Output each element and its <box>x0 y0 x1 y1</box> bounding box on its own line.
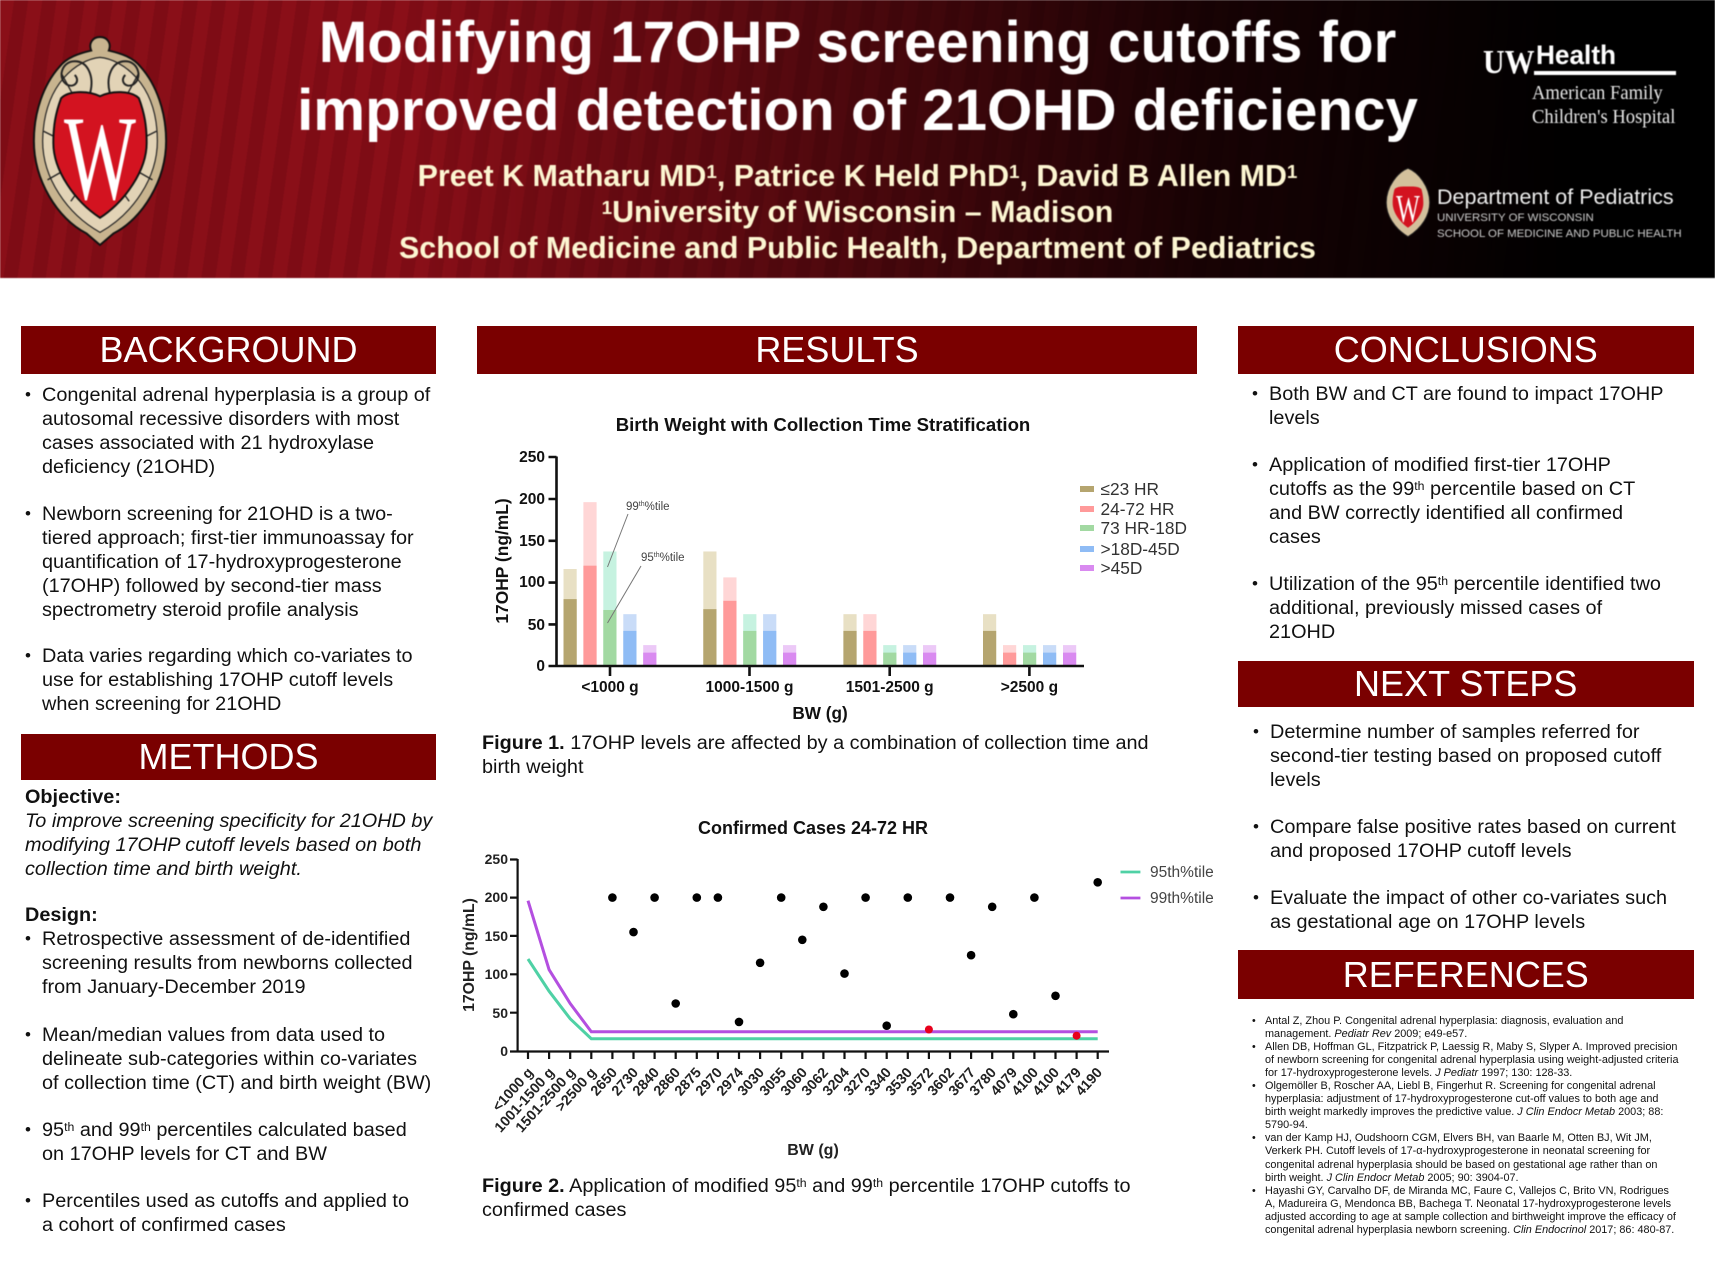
text: background bullet 1 <box>42 383 430 479</box>
text: reference list <box>1252 1014 1679 1236</box>
text: reference list: congenital adrenal hyperplasia newborn screening. Clin Endocrinol 2017; 86: 480-87. <box>1265 1224 1674 1236</box>
scatter chart: confirmed cases 24-72 HR: 3780 <box>967 1065 1000 1099</box>
heading: conclusions <box>1238 326 1694 374</box>
logo: UW Health American Family Children's Hospital: UW <box>1483 44 1535 81</box>
text: conclusion 2: and BW correctly identified all confirmed <box>1269 502 1623 524</box>
text: background bullet 2 <box>42 502 414 622</box>
scatter chart: confirmed cases 24-72 HR: 1001-1500 g <box>492 1065 558 1136</box>
bar chart: birth weight with collection time stratification: 24-72 HR <box>1100 499 1174 519</box>
text: objective <box>25 810 434 880</box>
heading: methods: METHODS <box>138 736 318 777</box>
text: reference list: Hayashi GY, Carvalho DF, de Miranda MC, Faure C, Vallejos C, Brito VN, Rodrigues <box>1265 1185 1669 1197</box>
bar chart: birth weight with collection time stratification: >45D <box>1100 558 1142 578</box>
caption: figure 2: confirmed cases <box>482 1199 626 1221</box>
text: background bullet 2: (17OHP) followed by second-tier mass <box>42 575 382 597</box>
text: next step 1 <box>1270 720 1661 792</box>
text: conclusion 1: Both BW and CT are found to impact 17OHP <box>1269 383 1664 405</box>
text: background bullet 2: spectrometry steroid profile analysis <box>42 599 359 621</box>
text: objective: modifying 17OHP cutoff levels based on both <box>25 834 421 856</box>
panel: next steps <box>1238 661 1694 933</box>
bar chart: birth weight with collection time stratification: 0 <box>536 658 545 675</box>
scatter chart: confirmed cases 24-72 HR: 4100 <box>1009 1065 1042 1099</box>
scatter chart: confirmed cases 24-72 HR: 1501-2500 g <box>513 1065 579 1136</box>
text: conclusion 2: cases <box>1269 526 1321 548</box>
text: background bullet 3: when screening for 21OHD <box>42 693 281 715</box>
authors and affiliation <box>399 158 1316 266</box>
logo: Department of Pediatrics: UNIVERSITY OF WISCONSIN <box>1437 212 1594 224</box>
text: reference list: A, Madureira G, Mendonca BB, Bachega T. Neonatal 17-hydroxyprogesterone levels <box>1265 1198 1671 1210</box>
scatter chart: confirmed cases 24-72 HR: 4179 <box>1052 1065 1085 1099</box>
bar chart: birth weight with collection time stratification: 200 <box>519 491 545 508</box>
text: next step 1: second-tier testing based on proposed cutoff <box>1270 745 1661 767</box>
authors and affiliation: School of Medicine and Public Health, Department of Pediatrics <box>399 230 1316 264</box>
text: background bullet 2: Newborn screening for 21OHD is a two- <box>42 503 393 525</box>
heading: background <box>21 326 436 374</box>
bar chart: birth weight with collection time stratification: Birth Weight with Collection Time Stratification <box>616 414 1030 435</box>
scatter chart: confirmed cases 24-72 HR: 150 <box>485 928 508 944</box>
text: design bullet 2: Mean/median values from data used to <box>42 1024 385 1046</box>
scatter chart: confirmed cases 24-72 HR: 100 <box>485 966 508 982</box>
scatter chart: confirmed cases 24-72 HR: 250 <box>485 851 508 867</box>
scatter chart: confirmed cases 24-72 HR: 3572 <box>904 1065 937 1099</box>
bar chart: birth weight with collection time stratification: >18D-45D <box>1100 539 1180 559</box>
scatter chart: confirmed cases 24-72 HR: 3055 <box>757 1065 790 1099</box>
scatter chart: confirmed cases 24-72 HR: 2650 <box>588 1065 621 1099</box>
scatter chart: confirmed cases 24-72 HR: 3062 <box>799 1065 832 1099</box>
logo: UW Health American Family Children's Hospital <box>1482 40 1677 128</box>
scatter chart: confirmed cases 24-72 HR: >2500 g <box>553 1065 600 1115</box>
caption: figure 1 <box>482 732 1149 778</box>
text: background bullet 1: Congenital adrenal hyperplasia is a group of <box>42 384 430 406</box>
panel: conclusions <box>1238 326 1694 643</box>
text: design bullet 1 <box>42 927 413 999</box>
text: next step 3: as gestational age on 17OHP levels <box>1270 911 1585 933</box>
text: reference list: Allen DB, Hoffman GL, Fitzpatrick P, Laessig R, Maby S, Slyper A. Improved precision <box>1265 1041 1677 1053</box>
caption: figure 1: birth weight <box>482 756 583 778</box>
logo: Department of Pediatrics <box>1386 168 1682 240</box>
scatter chart: confirmed cases 24-72 HR: 4079 <box>988 1065 1021 1099</box>
text: reference list: Olgemöller B, Roscher AA, Liebl B, Fingerhut R. Screening for congenital adrenal <box>1265 1080 1656 1092</box>
text: design label: Design: <box>25 904 98 926</box>
heading: references: REFERENCES <box>1343 954 1589 995</box>
scatter chart: confirmed cases 24-72 HR: 3677 <box>946 1065 979 1099</box>
heading: background: BACKGROUND <box>99 329 358 370</box>
text: reference list: van der Kamp HJ, Oudshoorn CGM, Elvers BH, van Baarle M, Otten BJ, Wit JM, <box>1265 1132 1652 1144</box>
bar chart: birth weight with collection time stratification: BW (g) <box>792 703 848 723</box>
heading: references <box>1238 950 1694 999</box>
scatter chart: confirmed cases 24-72 HR: 3602 <box>925 1065 958 1099</box>
title: Modifying 17OHP screening cutoffs for <box>319 10 1396 75</box>
scatter chart: confirmed cases 24-72 HR: 99th%tile <box>1150 890 1214 907</box>
bar chart: birth weight with collection time stratification <box>492 414 1187 723</box>
header banner <box>0 0 1715 278</box>
text: design bullet 1: Retrospective assessment of de-identified <box>42 928 410 950</box>
text: design bullet 1: screening results from newborns collected <box>42 952 413 974</box>
text: next step 1: levels <box>1270 769 1321 791</box>
text: next step 2 <box>1270 815 1676 863</box>
text: conclusion 1 <box>1269 382 1664 430</box>
text: design bullet 3: on 17OHP levels for CT and BW <box>42 1143 327 1165</box>
bar chart: birth weight with collection time stratification: 99 <box>626 501 639 513</box>
text: reference list: of newborn screening for congenital adrenal hyperplasia using weight-adjusted criteria <box>1265 1054 1679 1066</box>
heading: results <box>477 326 1197 374</box>
scatter chart: confirmed cases 24-72 HR: 2840 <box>630 1065 663 1099</box>
caption: figure 2: Figure 2. Application of modified 95th and 99th percentile 17OHP cutoffs to <box>482 1175 1131 1197</box>
scatter chart: confirmed cases 24-72 HR: 2860 <box>651 1065 684 1099</box>
text: objective label: Objective: <box>25 786 121 808</box>
text: design bullet 2 <box>42 1023 431 1095</box>
text: reference list: adjusted according to age at sample collection and birthweight improve the efficacy of <box>1265 1211 1676 1223</box>
text: reference list: congenital adrenal hyperplasia should be based on gestational age rather than on <box>1265 1159 1657 1171</box>
text: background bullet 1: deficiency (21OHD) <box>42 456 215 478</box>
caption: figure 1: Figure 1. 17OHP levels are affected by a combination of collection time and <box>482 732 1149 754</box>
bar chart: birth weight with collection time stratification: %tile <box>660 552 685 564</box>
scatter chart: confirmed cases 24-72 HR: <1000 g <box>490 1065 537 1115</box>
scatter chart: confirmed cases 24-72 HR: 3030 <box>735 1065 768 1099</box>
text: background bullet 1: autosomal recessive disorders with most <box>42 408 399 430</box>
text: background bullet 3: Data varies regarding which co-variates to <box>42 645 413 667</box>
scatter chart: confirmed cases 24-72 HR: 2970 <box>693 1065 726 1099</box>
text: background bullet 2: quantification of 17-hydroxyprogesterone <box>42 551 402 573</box>
text: conclusion 2: Application of modified first-tier 17OHP <box>1269 454 1611 476</box>
scatter chart: confirmed cases 24-72 HR: 3270 <box>841 1065 874 1099</box>
text: reference list: 5790-94. <box>1265 1119 1308 1131</box>
panel: background <box>21 326 436 715</box>
scatter chart: confirmed cases 24-72 HR: 3060 <box>778 1065 811 1099</box>
bar chart: birth weight with collection time stratification: 50 <box>528 617 545 634</box>
text: design bullet 3: 95th and 99th percentiles calculated based <box>42 1119 407 1141</box>
bar chart: birth weight with collection time stratification: 73 HR-18D <box>1100 518 1187 538</box>
scatter chart: confirmed cases 24-72 HR: 17OHP (ng/mL) <box>461 898 478 1012</box>
authors and affiliation: 1University of Wisconsin – Madison <box>602 194 1113 228</box>
text: design bullet 2: of collection time (CT) and birth weight (BW) <box>42 1072 431 1094</box>
panel: references <box>1238 950 1694 1236</box>
bar chart: birth weight with collection time stratification: 1000-1500 g <box>706 679 793 696</box>
text: design bullet 4: a cohort of confirmed cases <box>42 1214 286 1236</box>
text: conclusion 2: cutoffs as the 99th percentile based on CT <box>1269 478 1635 500</box>
bar chart: birth weight with collection time stratification: 1501-2500 g <box>846 679 934 696</box>
text: next step 2: and proposed 17OHP cutoff levels <box>1270 840 1572 862</box>
bar chart: birth weight with collection time stratification: 95 <box>641 552 654 564</box>
heading: next steps: NEXT STEPS <box>1354 663 1577 704</box>
text: next step 1: Determine number of samples referred for <box>1270 721 1639 743</box>
bar chart: birth weight with collection time stratification: 250 <box>519 449 545 466</box>
scatter chart: confirmed cases 24-72 HR: 2730 <box>609 1065 642 1099</box>
text: conclusion 2 <box>1269 453 1635 549</box>
bar chart: birth weight with collection time stratification: 17OHP (ng/mL) <box>492 498 512 624</box>
scatter chart: confirmed cases 24-72 HR: 200 <box>485 889 508 905</box>
panel: methods <box>21 734 436 1236</box>
title <box>297 10 1418 143</box>
scatter chart: confirmed cases 24-72 HR: 4100 <box>1030 1065 1063 1099</box>
icon: university crest <box>32 36 168 246</box>
text: objective: To improve screening specificity for 21OHD by <box>25 810 432 832</box>
text: background bullet 1: cases associated with 21 hydroxylase <box>42 432 374 454</box>
heading: results: RESULTS <box>755 329 919 370</box>
scatter chart: confirmed cases 24-72 HR: 2974 <box>714 1065 747 1099</box>
scatter chart: confirmed cases 24-72 HR: 3530 <box>883 1065 916 1099</box>
text: next step 2: Compare false positive rates based on current <box>1270 816 1676 838</box>
text: reference list: Antal Z, Zhou P. Congenital adrenal hyperplasia: diagnosis, evaluation and <box>1265 1014 1623 1026</box>
text: reference list: birth weight. J Clin Endocr Metab 2005; 90: 3904-07. <box>1265 1172 1519 1184</box>
title: improved detection of 21OHD deficiency <box>297 78 1418 143</box>
scatter chart: confirmed cases 24-72 HR: 2875 <box>672 1065 705 1099</box>
text: conclusion 3: Utilization of the 95th percentile identified two <box>1269 573 1661 595</box>
text: design bullet 3 <box>42 1118 407 1166</box>
text: design bullet 4: Percentiles used as cutoffs and applied to <box>42 1190 409 1212</box>
text: background bullet 3 <box>42 644 413 716</box>
bar chart: birth weight with collection time stratification: <1000 g <box>581 679 639 696</box>
logo: Department of Pediatrics: SCHOOL OF MEDICINE AND PUBLIC HEALTH <box>1437 228 1682 240</box>
text: next step 3 <box>1270 886 1667 934</box>
bar chart: birth weight with collection time stratification: %tile <box>645 501 670 513</box>
text: background bullet 2: tiered approach; first-tier immunoassay for <box>42 527 414 549</box>
text: reference list: Verkerk PH. Cutoff levels of 17-α-hydroxyprogesterone in neonatal screening for <box>1265 1145 1650 1157</box>
bar chart: birth weight with collection time stratification: th <box>639 501 645 508</box>
scatter chart: confirmed cases 24-72 HR: BW (g) <box>787 1142 839 1159</box>
bar chart: birth weight with collection time stratification: th <box>654 552 660 559</box>
scatter chart: confirmed cases 24-72 HR: 50 <box>492 1005 508 1021</box>
authors and affiliation: Preet K Matharu MD1, Patrice K Held PhD1, David B Allen MD1 <box>418 158 1297 192</box>
text: conclusion 3: additional, previously missed cases of <box>1269 597 1602 619</box>
text: reference list: hyperplasia: adjustment of 17-hydroxyprogesterone cut-off values to both age and <box>1265 1093 1658 1105</box>
scatter chart: confirmed cases 24-72 HR: 95th%tile <box>1150 864 1214 881</box>
text: conclusion 1: levels <box>1269 407 1320 429</box>
heading: conclusions: CONCLUSIONS <box>1334 329 1598 370</box>
text: reference list: management. Pediatr Rev 2009; e49-e57. <box>1265 1028 1467 1040</box>
heading: next steps <box>1238 661 1694 707</box>
panel: results <box>461 326 1214 1221</box>
logo: UW Health American Family Children's Hospital: Health <box>1536 40 1616 70</box>
heading: methods <box>21 734 436 780</box>
logo: UW Health American Family Children's Hospital: American Family <box>1532 82 1663 104</box>
text: design bullet 1: from January-December 2019 <box>42 976 306 998</box>
text: background bullet 3: use for establishing 17OHP cutoff levels <box>42 669 393 691</box>
bar chart: birth weight with collection time stratification: 150 <box>519 533 545 550</box>
text: conclusion 3: 21OHD <box>1269 621 1335 643</box>
scatter chart: confirmed cases 24-72 HR: 0 <box>500 1043 508 1059</box>
bar chart: birth weight with collection time stratification: >2500 g <box>1001 679 1058 696</box>
bar chart: birth weight with collection time stratification: ≤23 HR <box>1100 479 1159 499</box>
text: conclusion 3 <box>1269 572 1661 644</box>
scatter chart: confirmed cases 24-72 HR: Confirmed Cases 24-72 HR <box>698 818 928 838</box>
text: next step 3: Evaluate the impact of other co-variates such <box>1270 887 1667 909</box>
scatter chart: confirmed cases 24-72 HR: 4190 <box>1073 1065 1106 1099</box>
text: reference list: birth weight markedly improves the predictive value. J Clin Endocr Metab 2003; 88: <box>1265 1106 1663 1118</box>
caption: figure 2 <box>482 1175 1131 1221</box>
logo: Department of Pediatrics: Department of Pediatrics <box>1437 185 1674 209</box>
text: objective: collection time and birth weight. <box>25 858 302 880</box>
text: design bullet 2: delineate sub-categories within co-variates <box>42 1048 417 1070</box>
text: design bullet 4 <box>42 1189 409 1237</box>
logo: UW Health American Family Children's Hospital: Children's Hospital <box>1532 106 1675 128</box>
bar chart: birth weight with collection time stratification: 100 <box>519 574 545 591</box>
scatter chart: confirmed cases 24-72 HR: 3340 <box>862 1065 895 1099</box>
scatter chart: confirmed cases 24-72 HR <box>461 818 1214 1159</box>
scatter chart: confirmed cases 24-72 HR: 3204 <box>820 1065 853 1099</box>
text: reference list: for 17-hydroxyprogesterone levels. J Pediatr 1997; 130: 128-33. <box>1265 1067 1572 1079</box>
